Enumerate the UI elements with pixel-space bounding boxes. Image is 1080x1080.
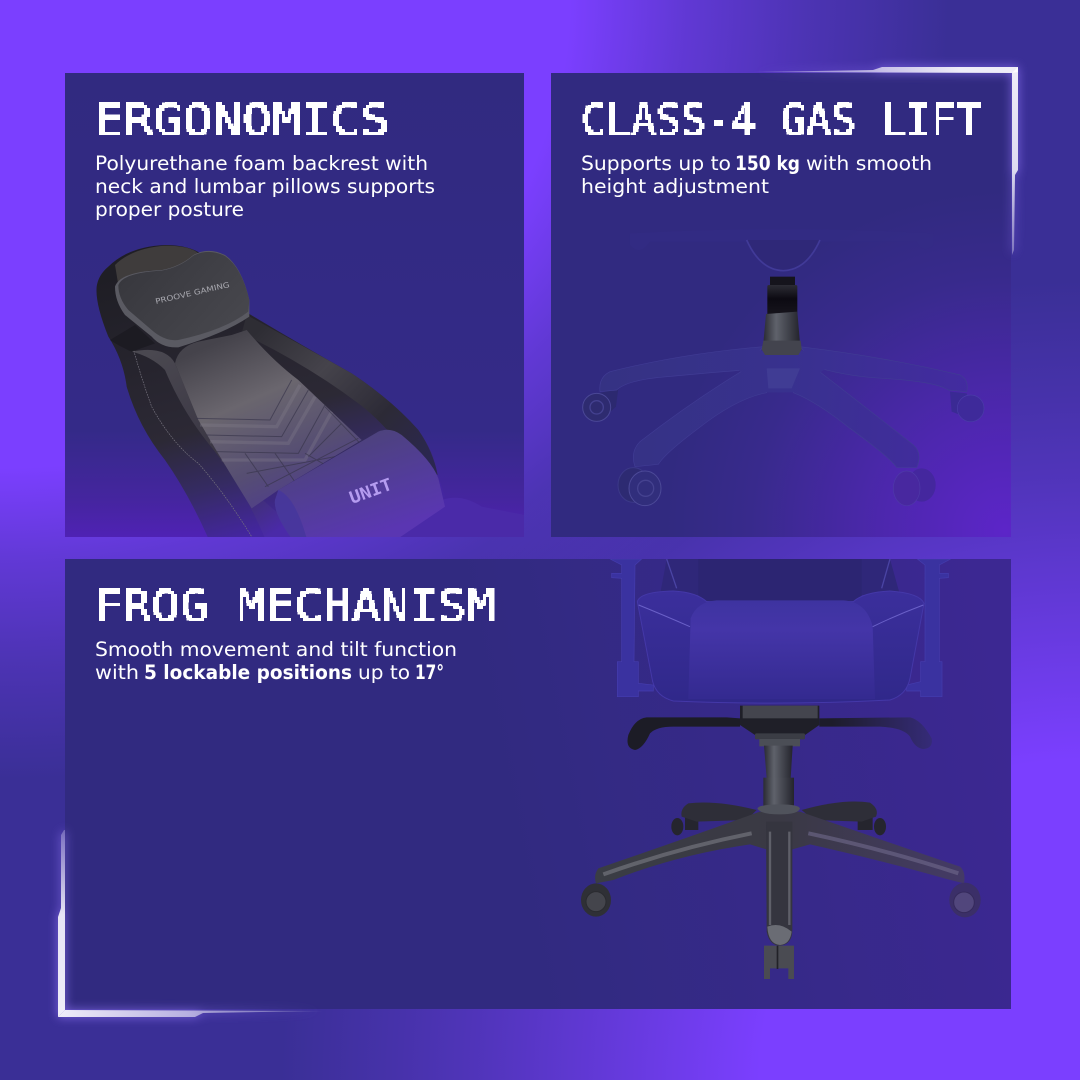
text block: ergonomics description: proper posture bbox=[95, 198, 244, 221]
heading: class-4 gas lift: CLASS-4 GAS LIFT bbox=[581, 95, 981, 146]
glowing frame: bottom left corner bbox=[58, 830, 323, 1017]
text block: gas lift description: 150 kg bbox=[735, 152, 800, 175]
quilting lines bbox=[197, 380, 360, 487]
text block: ergonomics description: neck and lumbar pillows supports bbox=[95, 175, 435, 198]
backrest shell bbox=[96, 245, 445, 538]
front casters bbox=[581, 883, 981, 979]
text block: frog mechanism description: 17° bbox=[415, 661, 444, 684]
head cushion top bbox=[115, 246, 198, 285]
centre panel bbox=[175, 330, 362, 508]
back casters bbox=[671, 817, 886, 835]
tilt mechanism bbox=[740, 706, 819, 735]
label: pillow brand: PROOVE GAMING bbox=[154, 280, 231, 306]
tilt levers bbox=[627, 717, 932, 750]
seat edge bbox=[398, 498, 525, 538]
text block: ergonomics description bbox=[95, 152, 435, 221]
text block: frog mechanism description: with bbox=[95, 661, 139, 684]
text block: frog mechanism description: up to bbox=[358, 661, 410, 684]
seat stitching bbox=[639, 605, 923, 627]
text block: gas lift description bbox=[581, 152, 932, 198]
panel: ergonomics bbox=[65, 73, 525, 538]
panel background bbox=[551, 73, 1011, 537]
glowing frame: top right corner bbox=[753, 67, 1018, 255]
back casters bbox=[583, 388, 984, 422]
faded seat underside bbox=[630, 229, 933, 271]
heading: ergonomics: ERGONOMICS bbox=[94, 95, 390, 146]
illustration: chair backrest with pillows bbox=[96, 245, 525, 538]
text block: ergonomics description: Polyurethane foam backrest with bbox=[95, 152, 428, 175]
five-star base bbox=[600, 347, 967, 467]
text block: frog mechanism description: 5 lockable positions bbox=[144, 661, 352, 684]
heading: frog mechanism: FROG MECHANISM bbox=[94, 581, 495, 632]
backrest behind seat bbox=[660, 559, 900, 602]
illustration: gas lift and five-star base bbox=[583, 229, 984, 506]
stitching bbox=[134, 350, 252, 536]
front casters bbox=[618, 468, 936, 506]
panel background bbox=[65, 559, 1011, 1009]
text block: gas lift description: Supports up to bbox=[581, 152, 731, 175]
lumbar pillow bbox=[275, 430, 445, 538]
strap bbox=[110, 325, 155, 352]
five-star base bbox=[595, 801, 964, 946]
gas cylinder bbox=[762, 277, 802, 355]
left bolster bbox=[132, 350, 223, 462]
panel: frog mechanism bbox=[65, 559, 1011, 1009]
text block: frog mechanism description: Smooth movement and tilt function bbox=[95, 638, 457, 661]
text block: gas lift description: height adjustment bbox=[581, 175, 769, 198]
base highlights bbox=[603, 832, 958, 925]
text block: frog mechanism description bbox=[95, 638, 457, 684]
text block: gas lift description: with smooth bbox=[806, 152, 932, 175]
column bbox=[755, 733, 805, 814]
neck pillow bbox=[115, 251, 249, 347]
armrest posts bbox=[610, 559, 951, 697]
seat cushion bbox=[689, 600, 874, 684]
illustration: chair seat and base bbox=[581, 559, 981, 979]
panel background bbox=[65, 73, 524, 537]
panel: class-4 gas lift bbox=[551, 73, 1011, 537]
seat shell bbox=[637, 591, 924, 703]
quilting bands bbox=[200, 385, 332, 460]
label: lumbar logo: UNIT bbox=[347, 475, 395, 509]
right bolster bbox=[242, 315, 438, 475]
